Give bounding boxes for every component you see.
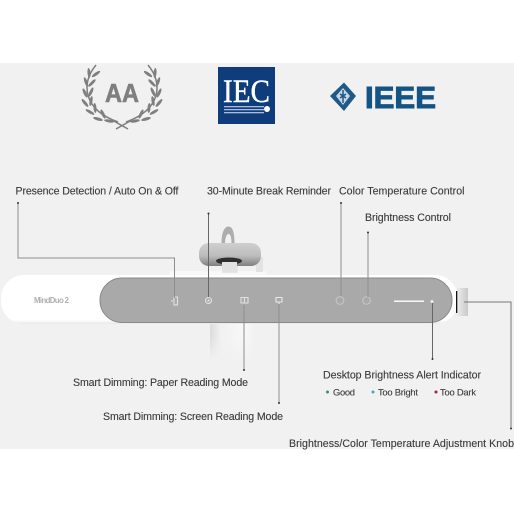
icon: IEC logo: IEC bbox=[223, 74, 270, 110]
label: break reminder: 30-Minute Break Reminder bbox=[207, 186, 331, 198]
product name: MindDuo 2 bbox=[34, 296, 70, 305]
label: screen reading: Smart Dimming: Screen Reading Mode bbox=[103, 411, 283, 423]
label: color temperature: Color Temperature Control bbox=[339, 186, 464, 198]
icon: IEC logo bbox=[218, 67, 275, 124]
icon: brightness bbox=[363, 297, 370, 304]
alert indicator bbox=[430, 300, 434, 303]
icon: IEEE logo: IEEE bbox=[365, 80, 436, 115]
label: adjustment knob: Brightness/Color Temperature Adjustment Knob bbox=[289, 438, 514, 450]
lamp head knob bbox=[170, 226, 266, 277]
label: alert indicator: Desktop Brightness Alert Indicator bbox=[323, 370, 481, 382]
background panel bbox=[0, 63, 514, 449]
icon: monitor bbox=[276, 298, 282, 304]
leader end dots bbox=[17, 202, 512, 430]
legend: alert states: Too Dark bbox=[440, 386, 476, 398]
icon: book bbox=[241, 298, 248, 303]
legend: alert states bbox=[326, 386, 476, 398]
icon: IEEE logo bbox=[330, 80, 436, 115]
lamp stand neck bbox=[208, 323, 256, 361]
label: paper reading: Smart Dimming: Paper Reading Mode bbox=[73, 377, 248, 389]
icon: AA laurel logo bbox=[81, 65, 163, 129]
icon: timer bbox=[206, 298, 212, 304]
legend: alert states: Too Bright bbox=[378, 386, 418, 398]
leader lines bbox=[18, 203, 511, 428]
brightness slider bbox=[394, 300, 424, 302]
icon: presence bbox=[171, 297, 178, 305]
control panel bbox=[100, 278, 452, 322]
label: brightness control: Brightness Control bbox=[365, 212, 451, 224]
adjustment knob bbox=[456, 288, 468, 316]
icon: AA laurel logo: AA bbox=[105, 78, 139, 108]
lamp bar white body bbox=[1, 275, 458, 324]
legend: alert states: Good bbox=[333, 386, 355, 398]
label: presence detection: Presence Detection / Auto On & Off bbox=[16, 186, 179, 198]
icon: color temperature bbox=[336, 297, 344, 304]
